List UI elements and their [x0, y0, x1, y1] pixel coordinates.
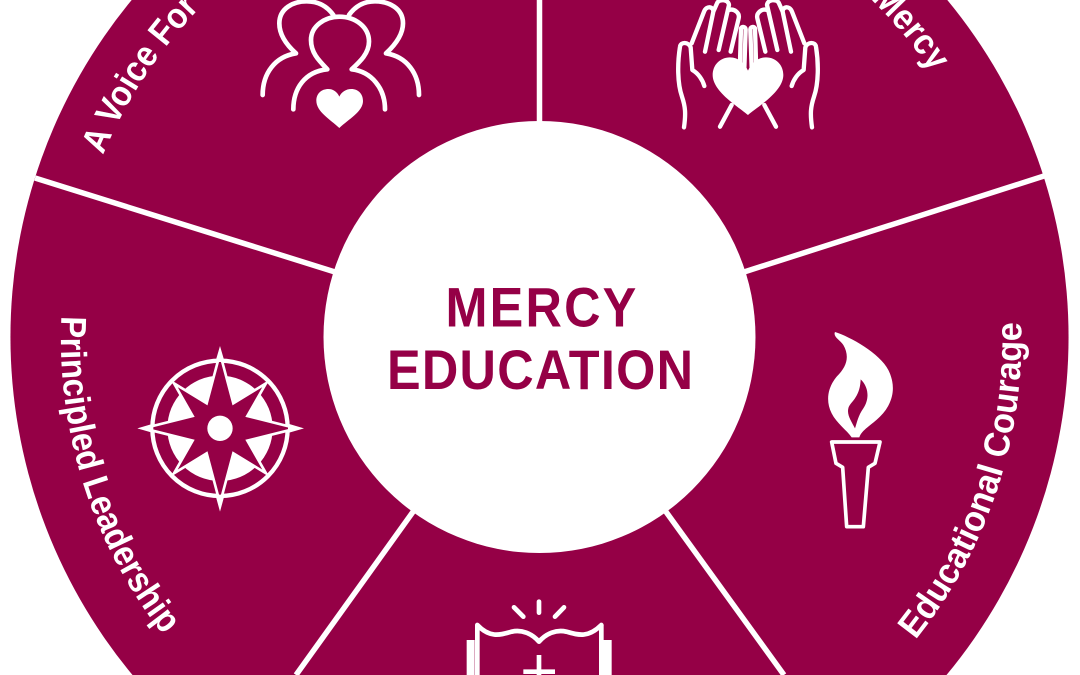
- icon: open hands with heart: [678, 0, 818, 127]
- center title: EDUCATION: [387, 340, 693, 402]
- segment label: Educational Courage: Educational Courage: [897, 323, 1029, 638]
- icon: compass star: [137, 346, 304, 512]
- segment label: Principled Leadership: Principled Leadership: [58, 318, 176, 632]
- icon: open book with cross: [467, 602, 612, 675]
- icon: torch: [828, 332, 893, 527]
- center title: [387, 277, 693, 402]
- center title: MERCY: [446, 277, 636, 339]
- center circle: [324, 121, 756, 553]
- icon: people with heart: [263, 1, 419, 128]
